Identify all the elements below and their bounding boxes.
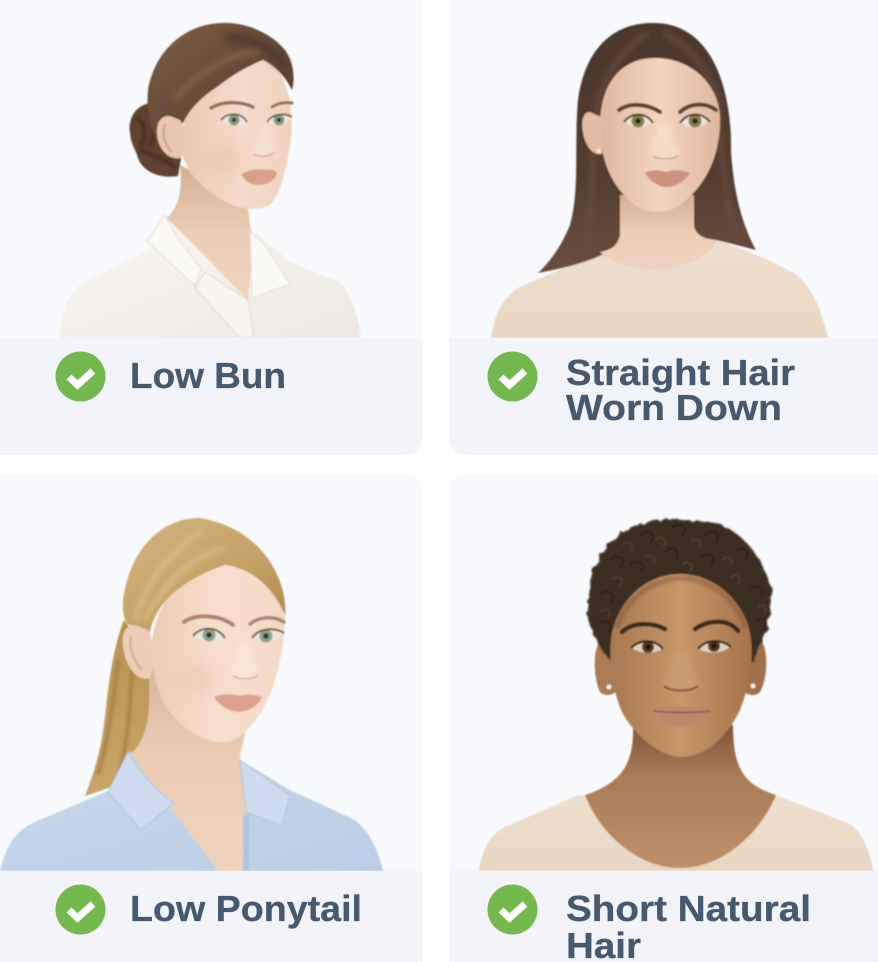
label — [566, 888, 811, 962]
collar — [147, 215, 290, 298]
bun — [130, 103, 186, 177]
label strip — [0, 871, 422, 962]
curls — [598, 525, 765, 633]
label strip — [0, 338, 422, 455]
label: Worn Down — [566, 387, 782, 428]
panel background — [0, 0, 422, 338]
label: Straight Hair — [566, 352, 795, 393]
check icon — [488, 352, 538, 402]
ear — [582, 112, 603, 154]
shirt — [479, 795, 873, 871]
facial features — [622, 622, 738, 727]
shirt — [491, 240, 828, 338]
neck and chest — [585, 725, 776, 868]
ears — [595, 642, 616, 695]
panel: low bun — [0, 0, 422, 455]
shirt — [59, 215, 361, 338]
hair — [588, 519, 772, 662]
ponytail — [85, 620, 150, 796]
panel: low ponytail — [0, 474, 422, 962]
shirt — [0, 752, 383, 871]
label strip — [449, 871, 878, 962]
label: Low Bun — [130, 355, 286, 396]
label — [566, 352, 795, 428]
face — [152, 555, 285, 742]
ear — [157, 116, 185, 158]
facial features — [205, 103, 292, 185]
panel background — [0, 474, 422, 871]
panel: straight hair worn down — [449, 0, 878, 455]
check icon — [56, 352, 106, 402]
check icon — [488, 884, 538, 934]
hair — [538, 23, 756, 273]
panel background — [449, 474, 878, 871]
collar — [108, 752, 290, 830]
hair — [147, 23, 294, 142]
panel: short natural hair — [449, 474, 878, 962]
label: Short Natural — [566, 888, 811, 929]
facial features — [619, 105, 716, 187]
panel background — [449, 0, 878, 338]
neck — [167, 165, 253, 300]
placket — [195, 272, 254, 338]
facial features — [173, 616, 284, 712]
portrait: low bun — [59, 23, 361, 338]
neck and chest — [130, 666, 246, 871]
label: Low Ponytail — [130, 888, 362, 929]
portrait: short natural hair — [479, 519, 873, 871]
face — [600, 58, 720, 212]
face — [181, 50, 292, 209]
portrait: low ponytail — [0, 518, 383, 871]
check icon — [56, 884, 106, 934]
neck — [600, 195, 718, 269]
hairline shading — [616, 578, 746, 628]
ear — [123, 625, 153, 679]
face — [610, 574, 752, 757]
portrait: straight hair — [491, 23, 828, 338]
placket — [243, 815, 249, 871]
label strip — [449, 338, 878, 455]
hair — [123, 518, 285, 632]
